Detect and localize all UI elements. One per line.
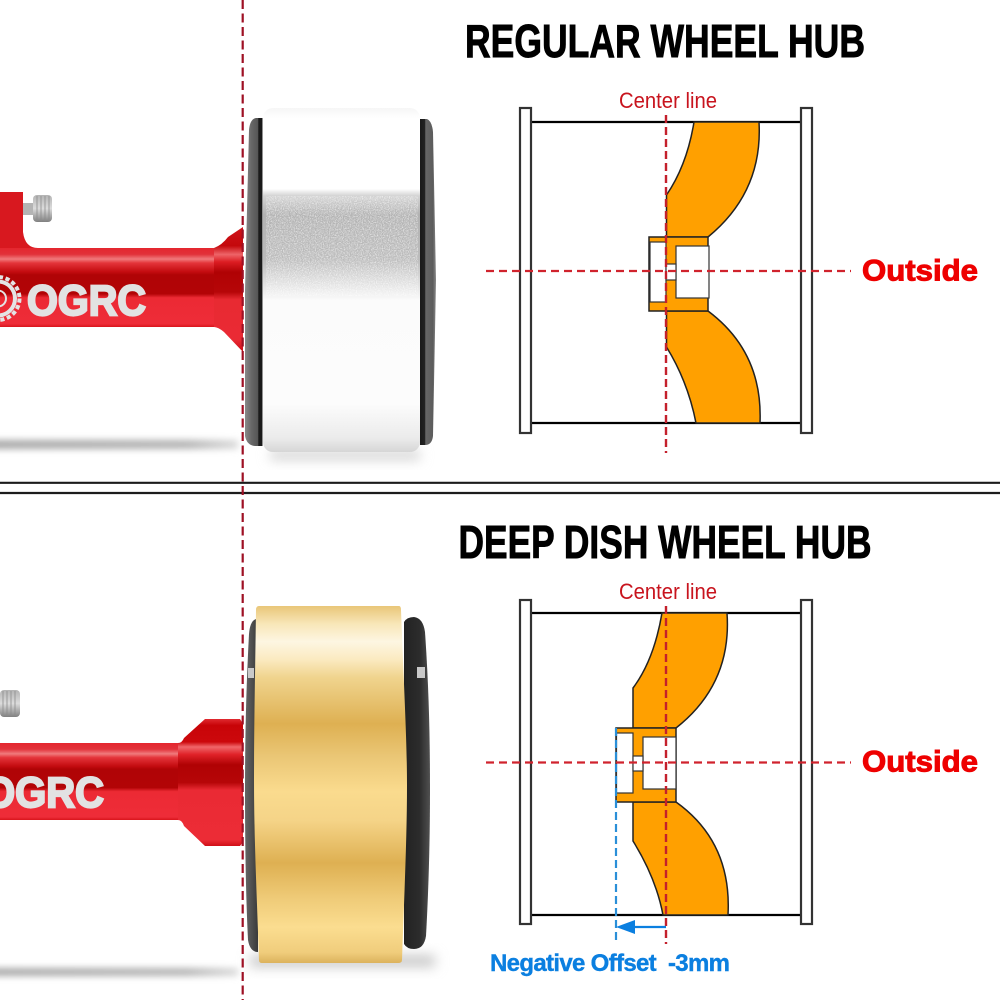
ground shadow (0, 440, 238, 449)
offset guide (615, 728, 617, 942)
photo: deep dish wheel hub assembly (0, 606, 435, 976)
set screw (0, 690, 20, 717)
center line (665, 115, 667, 453)
axis line (486, 270, 851, 272)
diagram: deep dish wheel hub (486, 600, 851, 944)
hub pockets (616, 733, 676, 793)
silver wheel body (263, 108, 420, 452)
section divider (0, 483, 1000, 493)
axle mount (0, 192, 60, 262)
title: regular wheel hub: REGULAR WHEEL HUB (465, 15, 865, 67)
diagram: regular wheel hub (486, 108, 851, 453)
axle collar (178, 719, 243, 846)
hub cross-section (616, 613, 728, 915)
axle flare (214, 227, 243, 352)
photo: regular wheel hub assembly (0, 108, 436, 460)
title: deep dish wheel hub: DEEP DISH WHEEL HUB (458, 516, 872, 568)
logo gear (0, 277, 20, 320)
axle shaft (0, 248, 220, 327)
hub cross-section (649, 122, 760, 423)
ring highlight (417, 667, 425, 678)
left flange (520, 600, 531, 924)
set screw (23, 195, 52, 222)
gold wheel body (254, 606, 407, 963)
wheel shadow (270, 450, 420, 460)
center line (665, 606, 667, 944)
rim lines (531, 122, 801, 423)
center line label: Center line (619, 88, 717, 113)
wheel left ring (245, 118, 264, 446)
axis line (486, 761, 851, 764)
ring highlight (248, 668, 254, 678)
center line label: Center line (619, 579, 717, 604)
negative offset label: Negative Offset -3mm (490, 950, 730, 977)
logo text: OGRC (27, 277, 146, 325)
right flange (801, 108, 812, 433)
wheel right ring (420, 119, 436, 445)
right flange (801, 600, 812, 924)
rim lines (531, 613, 801, 915)
outside label: Outside (862, 746, 978, 778)
hub pockets (650, 242, 709, 302)
photo center line (242, 0, 244, 1000)
wheel right ring (404, 617, 430, 949)
offset arrow (616, 920, 666, 934)
ground shadow (0, 968, 238, 976)
brushed texture (266, 196, 418, 296)
wheel left ring (245, 619, 258, 952)
left flange (520, 108, 531, 433)
axle shaft (0, 743, 182, 820)
outside label: Outside (862, 254, 978, 288)
wheel shadow (250, 955, 435, 967)
